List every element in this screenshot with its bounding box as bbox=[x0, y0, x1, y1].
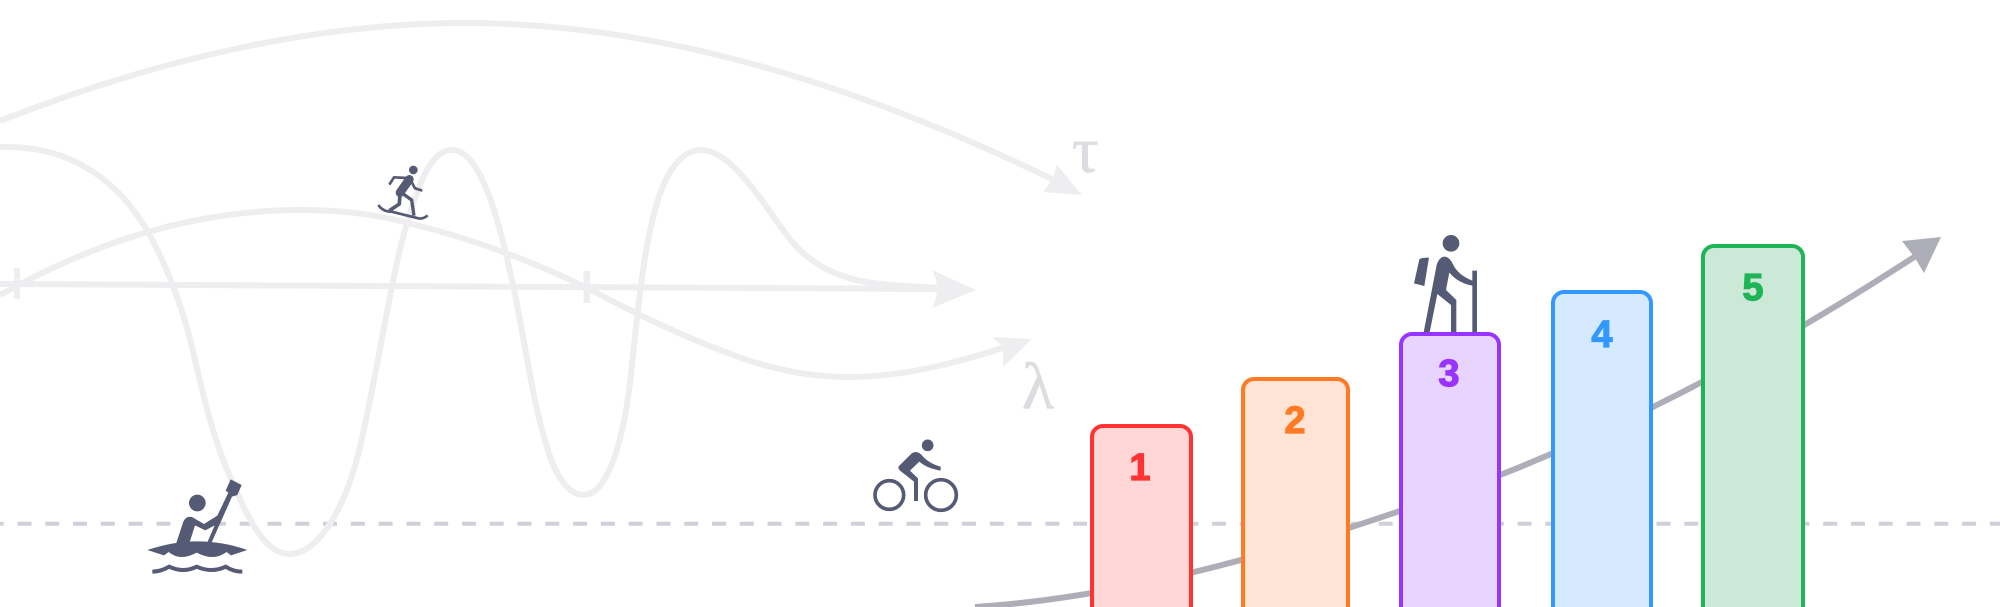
bar 4: 4 bbox=[1591, 314, 1613, 356]
bar 3 bbox=[1401, 334, 1499, 607]
icon: kayaker bbox=[147, 479, 247, 572]
bar 1 bbox=[1092, 426, 1191, 607]
tau symbol: τ bbox=[1072, 114, 1099, 187]
bar 5 bbox=[1703, 246, 1803, 607]
bar 2 bbox=[1243, 379, 1348, 607]
bar 5: 5 bbox=[1742, 267, 1764, 309]
tau curve arrow bbox=[0, 23, 1082, 195]
bar 2: 2 bbox=[1284, 400, 1306, 442]
lambda curve arrow bbox=[0, 210, 1032, 377]
wave curve bbox=[0, 147, 945, 554]
icon: cyclist bbox=[875, 439, 956, 510]
growth curve arrow bbox=[975, 237, 1941, 607]
icon: snowboarder bbox=[378, 166, 428, 219]
icon: hiker bbox=[1414, 235, 1477, 334]
time axis arrow bbox=[0, 268, 976, 308]
lambda symbol: λ bbox=[1022, 350, 1054, 423]
bar 4 bbox=[1553, 292, 1651, 607]
bar 1: 1 bbox=[1129, 447, 1151, 489]
bar 3: 3 bbox=[1438, 353, 1460, 395]
